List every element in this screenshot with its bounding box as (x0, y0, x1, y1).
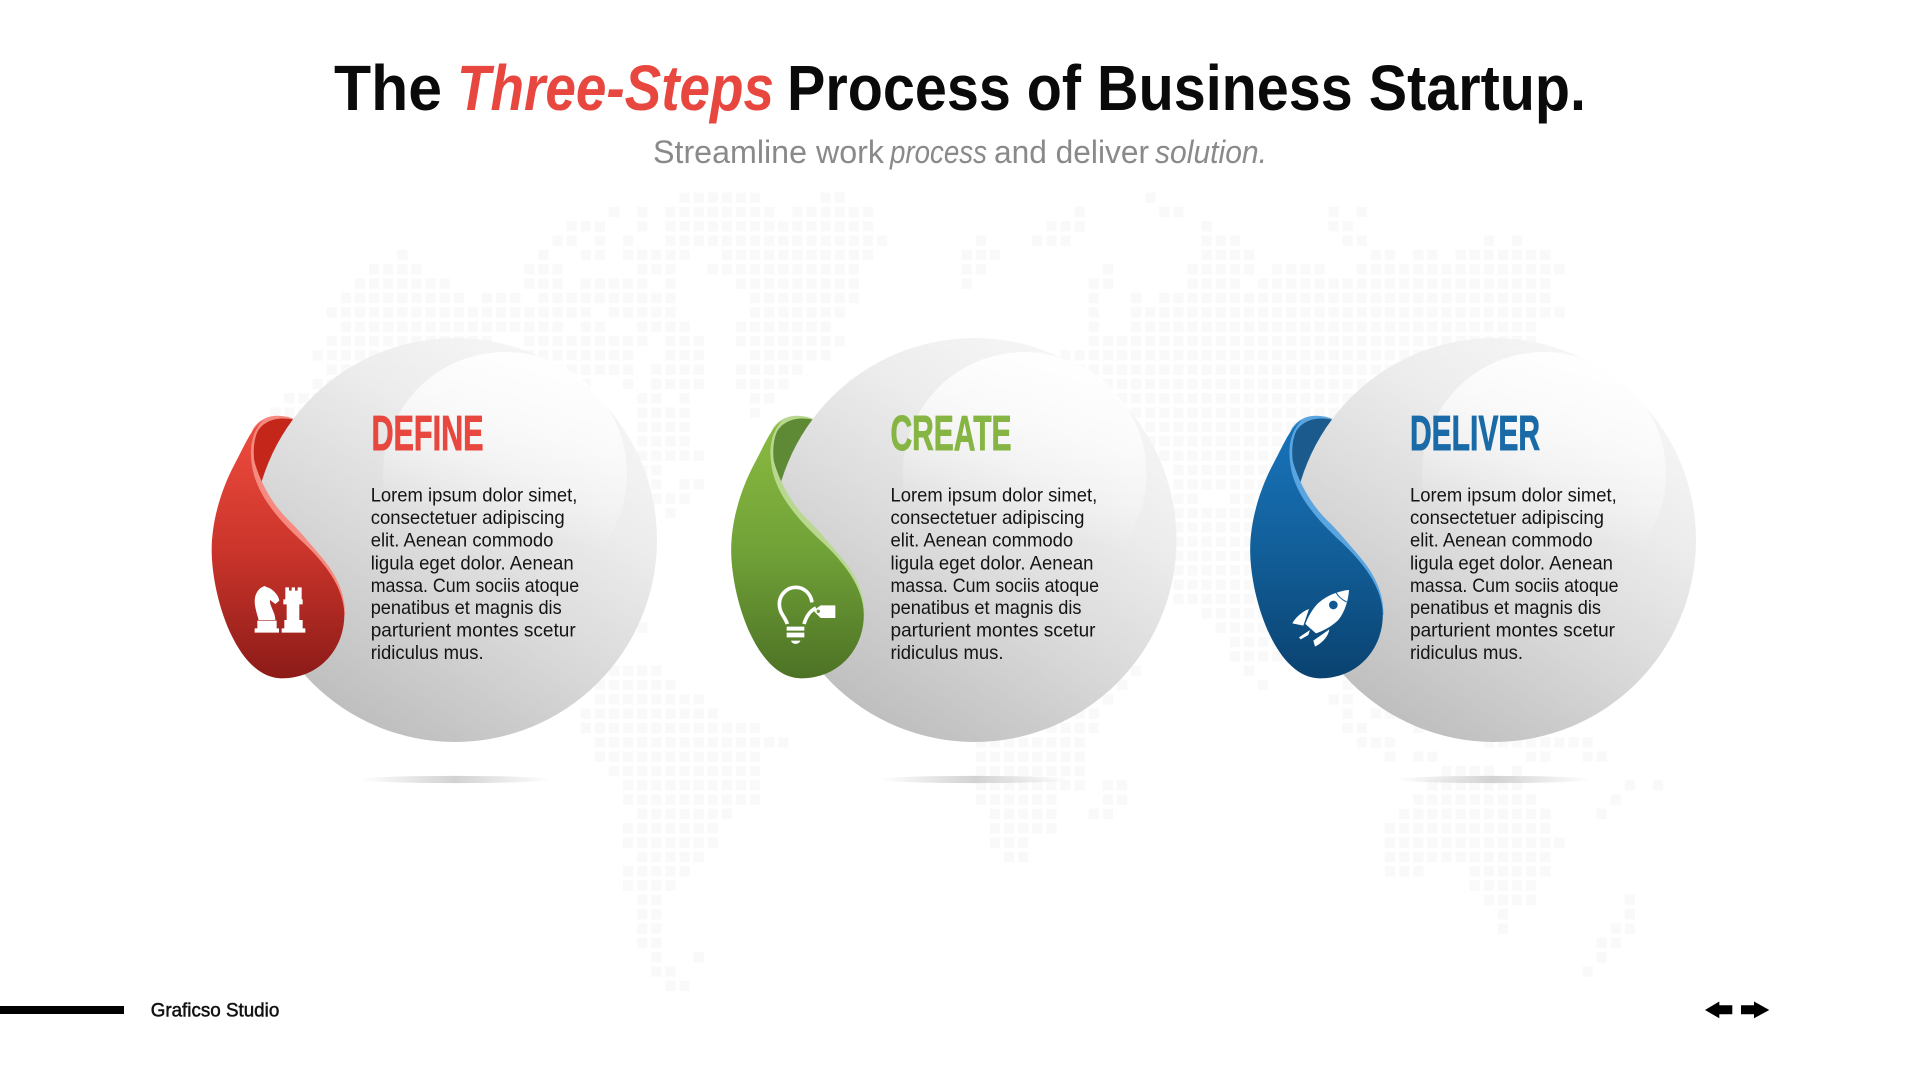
text block: deliver: parturient montes scetur (1410, 620, 1615, 642)
subtitle: Streamline work (653, 134, 885, 170)
text block: deliver: ligula eget dolor. Aenean (1410, 552, 1613, 574)
drop front: define (212, 420, 345, 678)
sphere: create (772, 338, 1176, 742)
text block: create: consectetuer adipiscing (890, 507, 1084, 529)
text block: define (371, 485, 579, 664)
text block: deliver: ridiculus mus. (1410, 642, 1523, 664)
footer label: Graficso Studio (151, 1001, 279, 1022)
text block: create (890, 485, 1099, 664)
icon: previous arrow (1705, 1002, 1732, 1018)
text block: deliver: Lorem ipsum dolor simet, (1410, 485, 1617, 507)
heading: define: DEFINE (372, 407, 484, 461)
text block: create: Lorem ipsum dolor simet, (890, 485, 1097, 507)
text block: define: ligula eget dolor. Aenean (371, 552, 574, 574)
icon: rocket (1292, 590, 1349, 647)
icon: chess pieces (255, 586, 305, 633)
title: Process of Business Startup. (787, 52, 1586, 124)
drop front: deliver (1250, 420, 1384, 678)
panel: deliver (1250, 338, 1696, 783)
text block: deliver: elit. Aenean commodo (1410, 530, 1593, 552)
text block: define: penatibus et magnis dis (371, 597, 562, 619)
subtitle (653, 134, 1267, 170)
text block: define: elit. Aenean commodo (371, 530, 554, 552)
text block: deliver: penatibus et magnis dis (1410, 597, 1601, 619)
text block: create: penatibus et magnis dis (890, 597, 1082, 619)
text block: define: consectetuer adipiscing (371, 507, 565, 529)
text block: create: ligula eget dolor. Aenean (890, 552, 1094, 574)
title: Three-Steps (457, 52, 774, 124)
icon: next arrow (1741, 1002, 1769, 1018)
title: The (334, 52, 442, 124)
text block: define: ridiculus mus. (371, 642, 484, 664)
text block: define: parturient montes scetur (371, 620, 576, 642)
text block: create: elit. Aenean commodo (890, 530, 1073, 552)
floor shadow: deliver (1395, 776, 1591, 783)
sphere: define (253, 338, 657, 742)
text block: deliver: massa. Cum sociis atoque (1410, 575, 1618, 597)
panel: create (731, 338, 1176, 783)
text block: define: Lorem ipsum dolor simet, (371, 485, 577, 507)
drop tail: deliver (1287, 416, 1358, 485)
heading: create: CREATE (890, 407, 1012, 461)
text block: create: parturient montes scetur (890, 620, 1096, 642)
text block: create: massa. Cum sociis atoque (890, 575, 1099, 597)
world map dot background (268, 191, 1665, 993)
panel: define (212, 338, 657, 783)
drop front: create (731, 420, 865, 678)
text block: deliver (1410, 485, 1618, 664)
drop tail: define (249, 416, 320, 485)
heading: deliver: DELIVER (1410, 407, 1540, 461)
floor shadow: create (878, 776, 1070, 783)
title (334, 52, 1586, 124)
text block: define: massa. Cum sociis atoque (371, 575, 579, 597)
icon: light bulb with tag (779, 587, 835, 644)
subtitle: and deliver (994, 134, 1149, 170)
subtitle: process (889, 134, 987, 170)
footer bar (0, 1006, 124, 1014)
floor shadow: define (359, 776, 551, 783)
drop tail: create (768, 416, 839, 485)
sphere: deliver (1292, 338, 1696, 742)
text block: create: ridiculus mus. (890, 642, 1004, 664)
subtitle: solution. (1155, 134, 1267, 170)
text block: deliver: consectetuer adipiscing (1410, 507, 1604, 529)
